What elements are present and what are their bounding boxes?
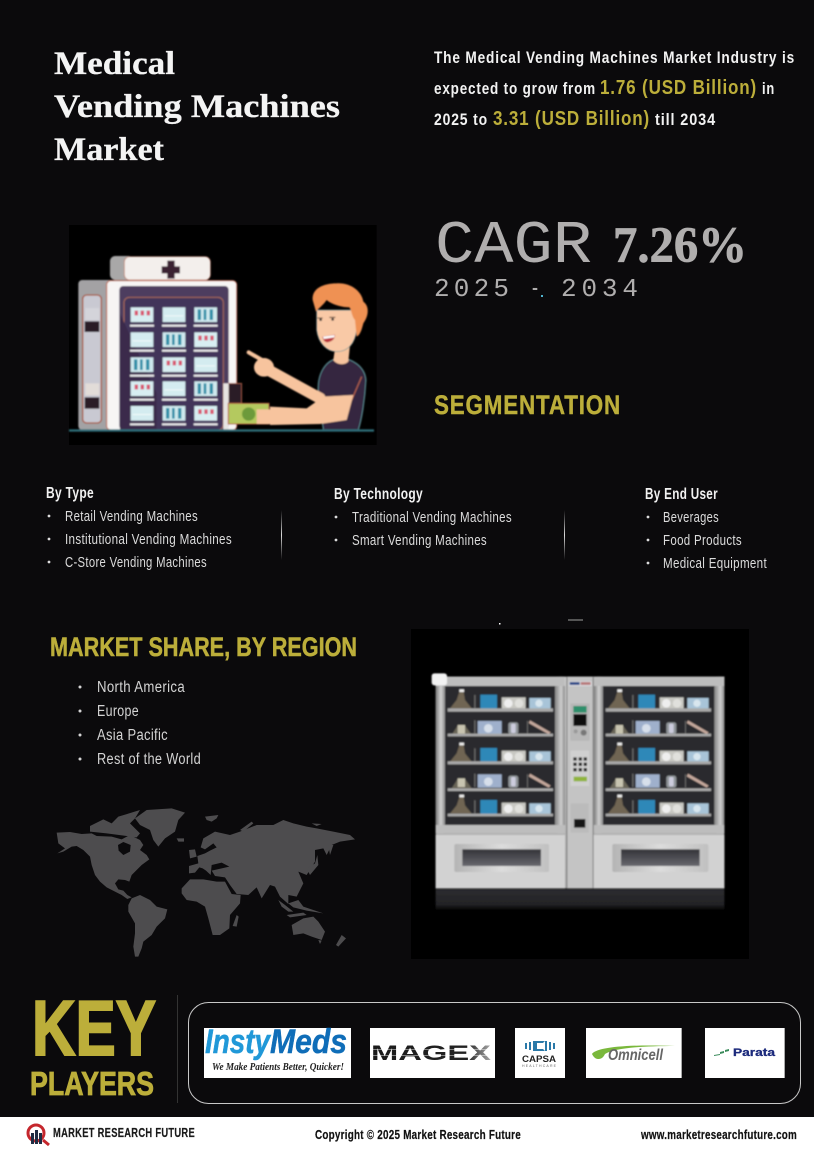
logo: InstyMeds bbox=[204, 1023, 351, 1078]
heading: segmentation: SEGMENTATION bbox=[434, 390, 621, 420]
heading: market share by region: MARKET SHARE, BY REGION bbox=[50, 632, 357, 662]
segment: by technology: Smart Vending Machines bbox=[352, 533, 487, 549]
icon: vending machine body bbox=[78, 280, 242, 430]
logo: Parata: Parata bbox=[733, 1047, 776, 1059]
center control column bbox=[566, 677, 594, 888]
segment: by type: By Type bbox=[46, 485, 94, 502]
CAGR period bbox=[434, 274, 638, 304]
title: Market bbox=[54, 132, 164, 168]
logo: InstyMeds: Insty bbox=[205, 1023, 272, 1061]
market forecast text: in bbox=[762, 80, 775, 98]
logo: Capsa: CAPSA bbox=[522, 1054, 557, 1064]
segment: by technology: Traditional Vending Machines bbox=[352, 510, 512, 526]
market forecast text: 1.76 (USD Billion) bbox=[600, 76, 757, 99]
logo: InstyMeds: We Make Patients Better, Quicker! bbox=[212, 1062, 344, 1073]
logo: Magex: MAGEX bbox=[371, 1042, 491, 1065]
right window bbox=[594, 677, 724, 833]
photo: double medical vending machine bbox=[411, 629, 749, 959]
market forecast text bbox=[434, 49, 795, 130]
world map bbox=[57, 808, 355, 957]
machine frame bbox=[436, 677, 724, 888]
heading: key players: PLAYERS bbox=[30, 1065, 154, 1102]
segment: by end user: Beverages bbox=[663, 510, 719, 526]
title: Vending Machines bbox=[54, 89, 340, 125]
segment: by type: C-Store Vending Machines bbox=[65, 555, 207, 571]
region list: Rest of the World bbox=[97, 751, 201, 768]
segment: by technology bbox=[334, 486, 512, 549]
title bbox=[54, 46, 340, 168]
title: Medical bbox=[54, 46, 175, 82]
icon: person pointing with banknote bbox=[249, 283, 368, 430]
segment: by end user: Food Products bbox=[663, 533, 742, 549]
lower drawers bbox=[436, 835, 724, 888]
icon: machine top cap with cross bbox=[110, 256, 210, 280]
icon: banknote bbox=[228, 403, 278, 424]
market forecast text: 3.31 (USD Billion) bbox=[493, 107, 650, 130]
market forecast text: till 2034 bbox=[655, 111, 716, 129]
CAGR value bbox=[435, 213, 747, 281]
left window bbox=[436, 677, 565, 833]
segment: by type: Retail Vending Machines bbox=[65, 509, 198, 525]
segment: by end user: Medical Equipment bbox=[663, 556, 767, 572]
logo: Capsa bbox=[515, 1028, 565, 1078]
panel: key player logos bbox=[188, 1002, 800, 1104]
segment: by end user: By End User bbox=[645, 486, 718, 503]
illustration: person at medical vending machine bbox=[69, 225, 377, 445]
CAGR period: 2034 bbox=[561, 274, 638, 304]
logo: Omnicell bbox=[586, 1028, 682, 1078]
segment: by type bbox=[46, 485, 232, 571]
icon: market research future logo bbox=[28, 1125, 49, 1145]
market forecast text: expected to grow from bbox=[434, 80, 596, 98]
logo: Magex bbox=[370, 1028, 495, 1078]
region list: Europe bbox=[97, 703, 139, 720]
CAGR value: 7.26% bbox=[613, 218, 747, 274]
region list bbox=[78, 679, 201, 768]
CAGR period: 2025 bbox=[434, 274, 509, 304]
footer: MARKET RESEARCH FUTURE bbox=[53, 1126, 195, 1140]
logo: InstyMeds: Meds bbox=[270, 1023, 347, 1061]
heading: key players: KEY bbox=[32, 984, 156, 1072]
logo: Capsa: HEALTHCARE bbox=[522, 1064, 557, 1068]
footer: Copyright © 2025 Market Research Future bbox=[315, 1128, 521, 1142]
logo: Omnicell: Omnicell bbox=[608, 1047, 664, 1064]
CAGR value: CAGR bbox=[435, 213, 592, 281]
segment: by end user bbox=[645, 486, 767, 572]
segment: by type: Institutional Vending Machines bbox=[65, 532, 232, 548]
logo: Parata bbox=[705, 1028, 785, 1078]
region list: North America bbox=[97, 679, 185, 696]
market forecast text: 2025 to bbox=[434, 111, 488, 129]
footer bbox=[0, 1117, 814, 1150]
region list: Asia Pacific bbox=[97, 727, 168, 744]
heading: key players bbox=[30, 984, 156, 1102]
CAGR period: - bbox=[530, 274, 540, 304]
segment: by technology: By Technology bbox=[334, 486, 423, 503]
